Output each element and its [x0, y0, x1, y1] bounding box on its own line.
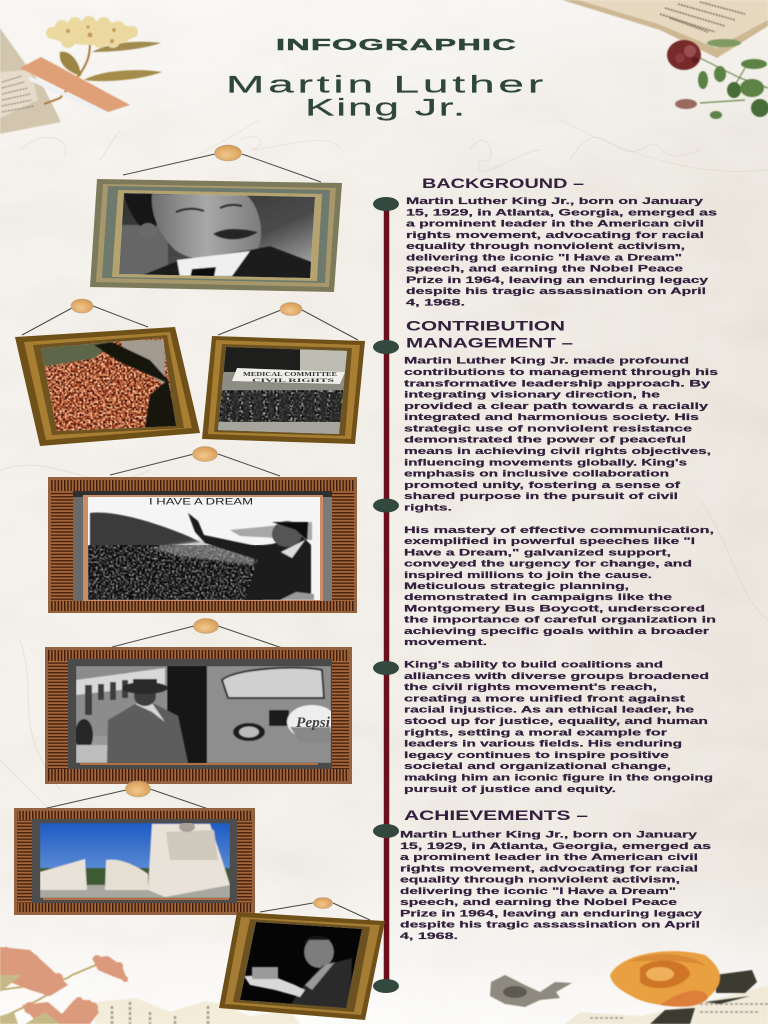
- text block: contribution paragraph three: racial injustice. As an ethical leader, he: [404, 704, 694, 715]
- section: achievements: [400, 808, 711, 941]
- text block: contribution paragraph one: Martin Luther King Jr. made profound: [404, 354, 689, 366]
- title kicker: INFOGRAPHIC: [276, 37, 517, 54]
- text block: contribution paragraph one: integrating visionary direction, he: [404, 388, 660, 400]
- text block: background: despite his tragic assassination on April: [406, 285, 706, 296]
- heading: contribution management: CONTRIBUTION: [406, 318, 565, 334]
- text block: contribution paragraph two: [404, 524, 716, 647]
- text block: background: 15, 1929, in Atlanta, Georgia, emerged as: [406, 206, 717, 217]
- text block: contribution paragraph three: the civil rights movement's reach,: [404, 681, 657, 692]
- text block: achievements: rights movement, advocating for racial: [400, 862, 698, 873]
- text block: background: 4, 1968.: [406, 296, 465, 308]
- text block: contribution paragraph one: integrated and harmonious society. His: [404, 411, 699, 422]
- framed photo: I have a dream: [48, 446, 357, 613]
- text block: contribution paragraph three: societal and organizational change,: [404, 760, 671, 771]
- framed photo: memorial: [14, 781, 255, 915]
- text block: contribution paragraph two: Meticulous strategic planning,: [404, 580, 629, 591]
- text block: contribution paragraph two: Montgomery Bus Boycott, underscored: [404, 602, 705, 614]
- text block: contribution paragraph three: King's ability to build coalitions and: [404, 658, 663, 670]
- title: Martin Luther: [226, 72, 547, 98]
- text block: contribution paragraph one: strategic use of nonviolent resistance: [404, 422, 692, 433]
- text block: contribution paragraph three: making him an iconic figure in the ongoing: [404, 772, 713, 782]
- text block: contribution paragraph one: promoted unity, fostering a sense of: [404, 479, 681, 490]
- text block: contribution paragraph three: [404, 658, 713, 794]
- text block: achievements: delivering the iconic "I Have a Dream": [400, 885, 676, 896]
- timeline rail: [373, 197, 399, 993]
- text block: background: Prize in 1964, leaving an enduring legacy: [406, 274, 709, 285]
- text block: background: Martin Luther King Jr., born on January: [406, 195, 704, 206]
- text block: contribution paragraph one: provided a clear path towards a racially: [404, 400, 709, 411]
- section: background: [406, 176, 717, 308]
- text block: contribution paragraph two: the importance of careful organization in: [404, 614, 716, 625]
- decoration: orange rose: [610, 951, 757, 1024]
- decoration: orange washi tape: [20, 57, 130, 113]
- decoration: moth: [490, 975, 572, 1007]
- decoration: open book top right: [562, 0, 768, 58]
- text block: background: delivering the iconic "I Have a Dream": [406, 251, 682, 262]
- text block: contribution paragraph three: legacy continues to inspire positive: [404, 749, 669, 760]
- text block: contribution paragraph three: stood up for justice, equality, and human: [404, 715, 708, 726]
- text block: contribution paragraph three: leaders in various fields. His enduring: [404, 738, 682, 749]
- text block: achievements: speech, and earning the Nobel Peace: [400, 896, 677, 907]
- text block: achievements: Martin Luther King Jr., born on January: [400, 828, 698, 840]
- heading: background: BACKGROUND –: [422, 176, 585, 191]
- decoration: open book top left: [0, 28, 61, 134]
- heading: achievements: ACHIEVEMENTS –: [404, 808, 589, 823]
- text block: contribution paragraph one: means in achieving civil rights objectives,: [404, 445, 711, 456]
- heading: contribution management: [406, 318, 574, 350]
- heading: contribution management: MANAGEMENT –: [406, 336, 574, 350]
- text block: contribution paragraph two: inspired millions to join the cause.: [404, 569, 652, 580]
- text block: achievements: [400, 828, 711, 941]
- framed photo: crowd: [15, 299, 200, 446]
- framed photo: I have a dream: I HAVE A DREAM: [149, 496, 253, 506]
- decoration: pressed yellow flower: [44, 16, 162, 104]
- text block: contribution paragraph three: rights, setting a moral example for: [404, 726, 668, 737]
- text block: background: speech, and earning the Nobel Peace: [406, 263, 683, 274]
- text block: contribution paragraph two: exemplified in powerful speeches like "I: [404, 535, 695, 546]
- framed photo: portrait: [90, 145, 342, 292]
- text block: achievements: 15, 1929, in Atlanta, Georgia, emerged as: [400, 840, 711, 851]
- decoration: red rose with leaves: [667, 39, 768, 119]
- title: [226, 72, 547, 122]
- text block: contribution paragraph two: demonstrated in campaigns like the: [404, 591, 672, 602]
- text block: background: rights movement, advocating for racial: [406, 229, 704, 240]
- text block: achievements: Prize in 1964, leaving an enduring legacy: [400, 907, 703, 918]
- text block: background: a prominent leader in the American civil: [406, 218, 704, 228]
- text block: contribution paragraph two: Have a Dream," galvanized support,: [404, 546, 671, 557]
- text block: achievements: equality through nonviolent activism,: [400, 874, 680, 884]
- text block: contribution paragraph one: influencing movements globally. King's: [404, 456, 687, 467]
- decoration: coral pressed flowers: [0, 947, 128, 1024]
- framed photo: march banner: MEDICAL COMMITTEE: [243, 371, 337, 378]
- text block: achievements: 4, 1968.: [400, 930, 458, 941]
- text block: contribution paragraph two: conveyed the urgency for change, and: [404, 558, 692, 568]
- text block: contribution paragraph two: achieving specific goals within a broader: [404, 625, 710, 636]
- text block: contribution paragraph one: contributions to management through his: [404, 366, 718, 377]
- framed photo: march banner: CIVIL RIGHTS: [252, 378, 334, 384]
- text block: contribution paragraph one: emphasis on inclusive collaboration: [404, 468, 669, 479]
- text block: contribution paragraph two: His mastery of effective communication,: [404, 524, 714, 535]
- framed photo: portrait with award: [219, 898, 385, 1020]
- section: contribution management: [404, 318, 718, 794]
- text block: contribution paragraph two: movement.: [404, 636, 487, 647]
- text block: background: [406, 195, 717, 308]
- text block: background: equality through nonviolent activism,: [406, 240, 685, 251]
- text block: contribution paragraph one: rights.: [404, 502, 452, 512]
- text block: achievements: despite his tragic assassination on April: [400, 919, 700, 930]
- decoration: torn newspaper bottom: [95, 985, 768, 1024]
- text block: contribution paragraph one: demonstrated the power of peaceful: [404, 434, 686, 445]
- framed photo: march banner: [202, 302, 365, 444]
- text block: contribution paragraph three: pursuit of justice and equity.: [404, 783, 616, 794]
- text block: contribution paragraph one: shared purpose in the pursuit of civil: [404, 490, 678, 501]
- title: King Jr.: [305, 94, 467, 122]
- framed photo: bus: [45, 618, 352, 784]
- text block: contribution paragraph three: creating a more unified front against: [404, 692, 685, 703]
- text block: contribution paragraph one: [404, 354, 718, 512]
- framed photo: bus: Pepsi: [296, 715, 331, 731]
- text block: contribution paragraph one: transformative leadership approach. By: [404, 377, 711, 388]
- text block: contribution paragraph three: alliances with diverse groups broadened: [404, 670, 709, 681]
- text block: achievements: a prominent leader in the American civil: [400, 851, 698, 862]
- timeline dots: [373, 197, 399, 993]
